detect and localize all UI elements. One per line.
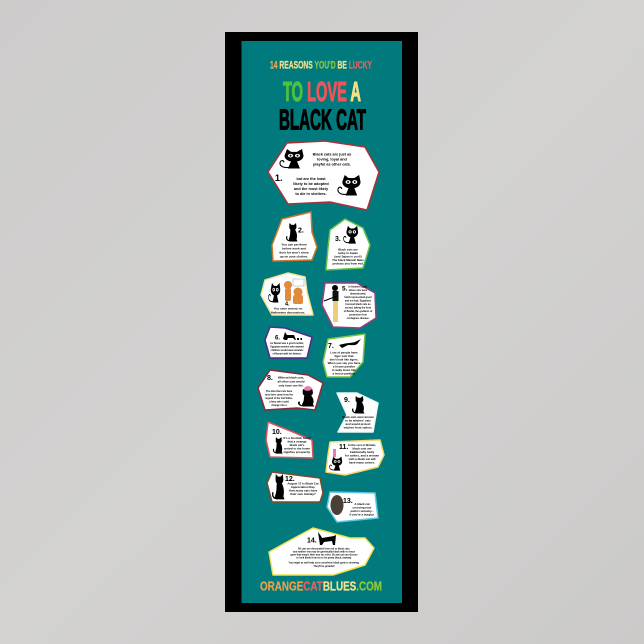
text block: have many suitors. — [349, 460, 375, 464]
reason number: 12. — [285, 476, 295, 483]
icon: walking cat with kittens — [283, 332, 302, 340]
text block — [342, 415, 374, 430]
text block — [265, 376, 305, 407]
text block: legend of the Cat Sidhe, — [265, 397, 293, 400]
text block: Lots of people have — [330, 350, 358, 354]
text block: change into a — [271, 404, 287, 407]
text block — [344, 286, 372, 320]
reason number: 13. — [343, 498, 353, 505]
text block: protection from — [349, 314, 367, 316]
text block: children would wear amulets — [271, 349, 304, 352]
reason number: 14. — [307, 538, 317, 544]
poster black frame — [225, 32, 418, 612]
reason number: 11. — [339, 444, 348, 451]
panel 2 — [272, 212, 317, 261]
icon: sitting cat — [274, 437, 283, 454]
text block: The black Maneki Neko — [332, 258, 364, 262]
text block: if you're a burglar. — [350, 512, 375, 516]
text block: to be witches' cats — [345, 418, 371, 422]
icon: cat with fairy wings — [299, 386, 314, 407]
text block: and would protect — [346, 422, 370, 426]
footer website: ORANGECATBLUES.COM — [260, 580, 382, 594]
reason number: 4. — [285, 302, 290, 308]
icon: Egyptian figure — [324, 285, 338, 322]
icon: orange cats — [284, 279, 304, 304]
text block: Without black cats, — [278, 376, 304, 380]
text block — [328, 350, 361, 376]
text block: and neither one may be genetically black with no trace — [293, 550, 356, 554]
text block: that a strange — [288, 440, 307, 444]
icon: cat face — [344, 226, 358, 244]
text block: their own holiday? — [290, 492, 316, 496]
text block: witches from sailors. — [343, 426, 373, 430]
text block: August 17 is Black Cat — [287, 482, 319, 486]
panel 4 — [261, 273, 313, 315]
text block: lucky in Japan — [338, 251, 358, 255]
reason number: 7. — [328, 343, 334, 350]
text block: traditionally lucky — [350, 450, 375, 454]
text block: How many cats have — [289, 488, 318, 492]
panel 5 — [322, 283, 376, 328]
text block: only have one life. — [278, 384, 304, 388]
text block: A black cat — [354, 502, 370, 506]
text block: black represented good — [345, 296, 372, 299]
reason number: 9. — [344, 397, 350, 404]
text block: Black cats are — [338, 248, 358, 252]
icon: portrait — [330, 495, 344, 515]
text block: Egyptian women who wanted — [270, 346, 304, 348]
text block — [283, 436, 311, 454]
text block: path is unlucky-- — [351, 509, 374, 513]
text block: You can pet them — [281, 242, 307, 246]
text block: Black cats are just as — [313, 152, 351, 156]
panel 6 — [265, 327, 312, 358]
text block: and not bad. Egyptians — [345, 300, 372, 302]
panel 12 — [267, 472, 323, 502]
icon: black cat — [338, 175, 361, 196]
text block: As Bastet was a good mother, — [270, 342, 304, 345]
text block: (and Japan is cool!) — [334, 254, 362, 258]
text block — [345, 443, 379, 464]
text block: black cat's — [290, 443, 305, 447]
text block: don't look like tigers. — [330, 358, 359, 362]
text block: signifies prosperity. — [283, 450, 311, 454]
text block — [350, 502, 375, 516]
text block: Black cats were known — [342, 415, 374, 419]
text block: nine lives came from the — [265, 394, 294, 396]
text block — [289, 548, 360, 568]
text block: gene that means their true fur color. So any cat can choose — [290, 554, 358, 556]
text block: to look likely from fur to be pretty black, anyway. — [296, 556, 352, 560]
reason number: 10. — [272, 429, 282, 436]
icon: leaping panther — [339, 339, 361, 348]
panel 8 — [258, 370, 323, 410]
text block: but are the least — [296, 177, 326, 181]
title line 3: BLACK CAT — [279, 104, 366, 136]
text block: for sailors, and a woman — [345, 454, 379, 458]
reason number: 6. — [275, 336, 280, 342]
text block: playful as other cats. — [313, 162, 351, 166]
text block: You save money on — [274, 306, 303, 310]
title — [270, 60, 372, 136]
panel 3 — [326, 219, 370, 270]
panel 11 — [326, 440, 384, 475]
title line 2: TO LOVE A — [283, 76, 361, 107]
text block: When you say you have — [328, 361, 361, 365]
icon: witch cat — [353, 396, 364, 414]
text block: arrival to the home — [284, 446, 310, 450]
icon: cat with bottle — [330, 449, 342, 471]
text block: black cats are — [352, 446, 372, 450]
text block: In Ancient Egypt, — [348, 286, 368, 288]
text block: to die in shelters. — [295, 192, 327, 196]
text block: of Bastet with her kittens. — [272, 352, 302, 356]
panel 1 — [268, 141, 379, 210]
text block: all other cats would — [278, 380, 305, 384]
panel 14 — [269, 528, 374, 575]
icon: black cat standing — [268, 283, 280, 303]
icon: walking cat — [318, 532, 336, 545]
reason number: 8. — [267, 375, 273, 382]
text block: a house panther — [333, 364, 356, 368]
text block: sacred, taking the form — [345, 306, 371, 310]
text block: domesticated, — [350, 292, 366, 296]
panel 10 — [266, 422, 313, 458]
text block: tiger cats that — [335, 354, 354, 358]
text block — [271, 306, 305, 314]
panel 9 — [337, 393, 378, 432]
icon: cat on pedestal — [273, 474, 284, 499]
text block: with a black cat will — [348, 457, 376, 461]
text block: a fairy who could — [269, 400, 289, 404]
text block: protects you from evil. — [332, 262, 364, 266]
text block — [293, 152, 351, 196]
icon: sitting cat — [287, 223, 298, 242]
panel 13 — [327, 492, 378, 522]
text block: honored black cats as — [345, 303, 371, 306]
text block: The idea that cats have — [266, 390, 293, 393]
reason number: 3. — [335, 236, 341, 243]
text block: loving, loyal and — [317, 158, 348, 162]
text block: Appreciation Day. — [291, 485, 315, 489]
teal panel — [242, 41, 402, 603]
text block: Halloween decorations. — [271, 310, 305, 314]
text block: All cats are descended from red or black cats, — [298, 548, 350, 550]
text block: it really looks like — [332, 368, 356, 372]
text block: likely to be adopted — [293, 182, 329, 186]
text block — [332, 248, 364, 266]
reason number: 1. — [275, 173, 283, 183]
text block — [287, 482, 319, 496]
text block: In the rest of Britain, — [348, 443, 376, 447]
text block — [270, 342, 304, 356]
text block: up on your clothes. — [280, 254, 308, 258]
reason number: 2. — [298, 228, 304, 234]
icon: black cat — [280, 149, 304, 169]
text block: contagious disease. — [347, 317, 370, 320]
text block: their fur won't show — [279, 250, 309, 254]
text block: They'll be grateful! — [313, 565, 335, 568]
text block: It's a Scottish belief — [283, 436, 311, 440]
text block: and the most likely — [294, 187, 329, 191]
text block — [279, 242, 309, 258]
title line 1: 14 REASONS YOU'D BE LUCKY — [270, 60, 372, 72]
text block: a house panther. — [333, 372, 356, 376]
text block: where cats were — [349, 289, 368, 292]
reason number: 5. — [342, 286, 348, 292]
text block: of Bastet, the goddess of — [344, 310, 372, 313]
text block: You might as well help out a cat whose black gene is showing. — [289, 562, 360, 564]
panel 7 — [323, 334, 365, 377]
text block: before work and — [282, 246, 306, 250]
text block: crossing your — [352, 506, 372, 510]
